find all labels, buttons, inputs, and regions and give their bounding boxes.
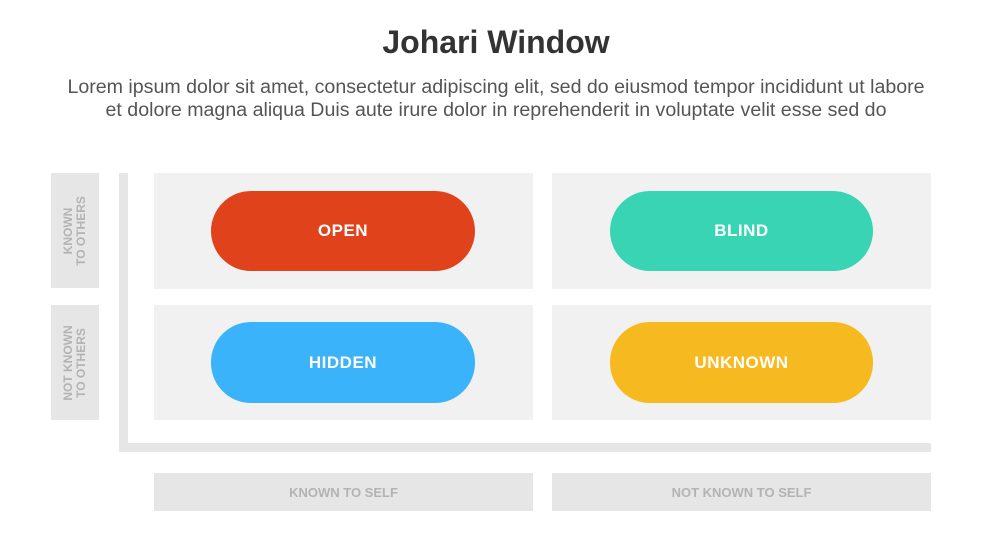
label: known to self: KNOWN TO SELF	[289, 484, 398, 500]
label: known to others: TO OTHERS	[74, 196, 88, 265]
label: known to others	[51, 173, 99, 288]
pill: unknown	[610, 322, 873, 403]
panel: unknown	[552, 305, 931, 420]
pill: open	[211, 191, 475, 271]
pill: unknown: UNKNOWN	[694, 352, 789, 372]
pill: hidden	[211, 322, 475, 403]
pill: open: OPEN	[318, 221, 368, 240]
axis: horizontal	[119, 443, 931, 452]
label: known to self	[154, 473, 533, 511]
axis: vertical	[119, 173, 128, 452]
subtitle text: et dolore magna aliqua Duis aute irure dolor in reprehenderit in voluptate velit esse sed do	[106, 99, 886, 121]
pill: blind: BLIND	[714, 221, 769, 240]
pill: hidden: HIDDEN	[309, 352, 377, 372]
label: not known to others: TO OTHERS	[74, 328, 88, 397]
panel: hidden	[154, 305, 533, 420]
panel: open	[154, 173, 533, 289]
label: not known to others	[51, 305, 99, 420]
title: Johari Window	[382, 24, 610, 60]
subtitle text: Lorem ipsum dolor sit amet, consectetur adipiscing elit, sed do eiusmod tempor incididunt ut labore	[67, 76, 925, 98]
pill: blind	[610, 191, 873, 271]
label: not known to self	[552, 473, 931, 511]
subtitle text	[67, 76, 925, 121]
label: not known to others: NOT KNOWN	[61, 325, 75, 400]
panel: blind	[552, 173, 931, 289]
label: not known to self: NOT KNOWN TO SELF	[672, 484, 811, 500]
label: known to others: KNOWN	[61, 207, 75, 254]
